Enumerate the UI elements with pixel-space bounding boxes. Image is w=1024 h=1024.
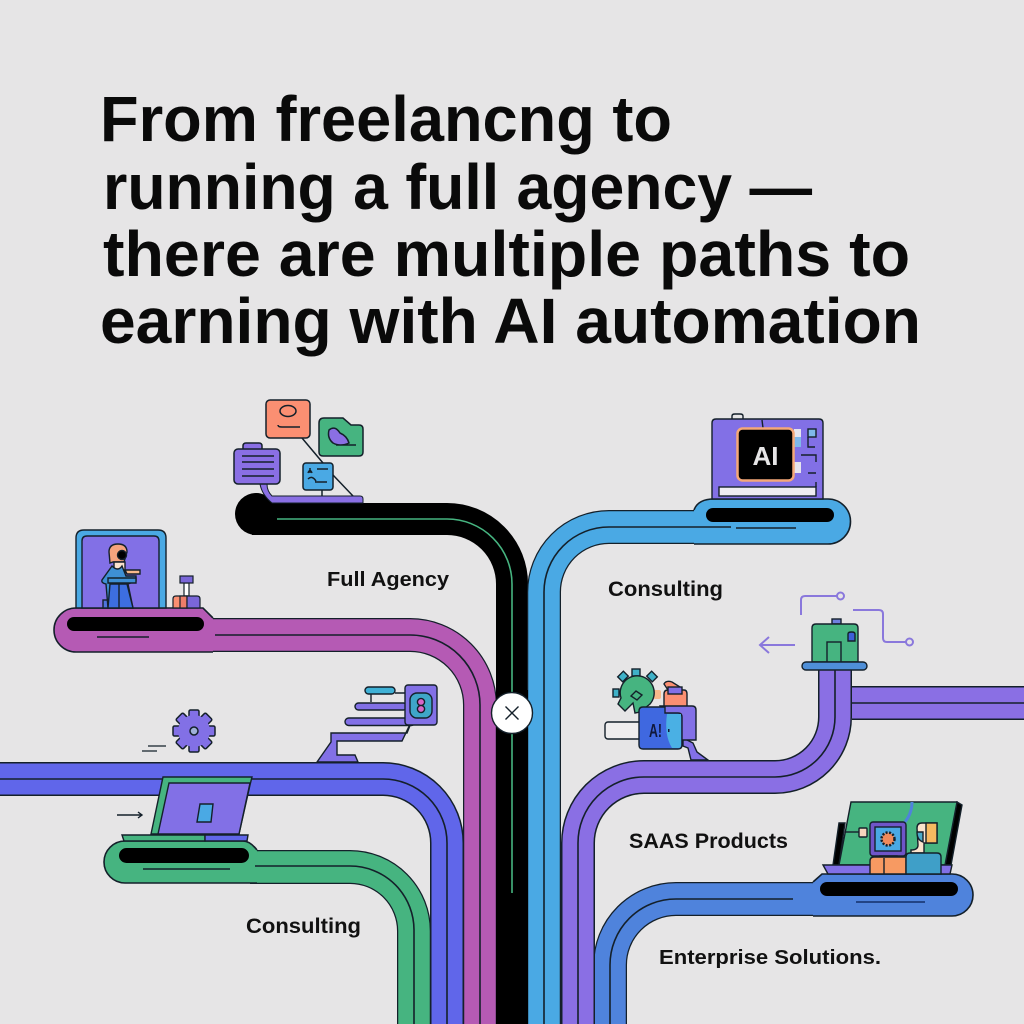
icon: gear and AI tile <box>605 669 708 760</box>
circuit lines and arrow <box>760 592 913 653</box>
title: running a full agency — <box>103 151 812 223</box>
junction icon: close <box>492 692 532 734</box>
icon: person in frame <box>76 530 166 608</box>
title: From freelancng to <box>100 83 672 155</box>
path: purple saas <box>578 670 835 1024</box>
icon: AI chip: AI <box>752 441 778 471</box>
black pipe lower section <box>496 690 528 1024</box>
path: enterprise blue <box>610 874 973 1024</box>
icon: house <box>802 619 867 670</box>
motion dashes <box>142 746 166 751</box>
path: magenta <box>54 608 480 1024</box>
title: there are multiple paths to <box>103 218 910 290</box>
label: consulting left: Consulting <box>246 915 361 938</box>
path: purple right horizontal <box>852 686 1024 720</box>
path: consulting green <box>104 841 414 1024</box>
path: consulting blue <box>544 499 850 1024</box>
icon: laptop <box>122 777 252 841</box>
path: indigo <box>0 779 447 1024</box>
label: full agency: Full Agency <box>327 569 450 591</box>
icon: AI chip <box>712 414 823 499</box>
title <box>100 83 921 357</box>
path: full agency black <box>235 493 512 1024</box>
icon: gear and AI tile: A! <box>649 721 662 741</box>
label: saas products: SAAS Products <box>629 830 788 853</box>
label: enterprise solutions: Enterprise Solutions. <box>659 947 881 969</box>
arrow: into laptop <box>117 812 142 818</box>
icon group: full agency documents <box>234 400 363 503</box>
green centre line <box>511 690 513 893</box>
label: consulting right: Consulting <box>608 578 723 601</box>
icon: gear <box>173 710 215 752</box>
icon: saas dashboard <box>823 802 962 874</box>
icon: server arm <box>317 685 437 762</box>
icon: small suitcase <box>173 576 200 608</box>
title: earning with AI automation <box>100 285 921 357</box>
